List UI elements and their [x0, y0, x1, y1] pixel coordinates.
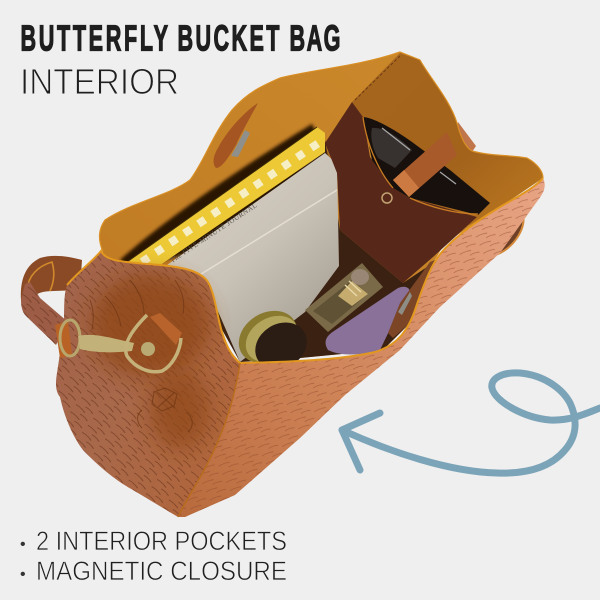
suede rim edge	[99, 52, 543, 252]
title: BAG	[290, 19, 341, 59]
dark slit behind book	[120, 124, 330, 270]
yellow cover	[127, 127, 325, 272]
side seam	[178, 363, 240, 517]
title: BUTTERFLY	[20, 19, 168, 59]
shoulder strap	[21, 256, 82, 345]
seam stitching	[355, 56, 400, 100]
arrow	[342, 373, 600, 473]
book title: The FIVE-MINUTE JOURNAL	[169, 201, 259, 265]
strap keeper	[55, 321, 72, 358]
page block	[160, 153, 339, 362]
brass clasp hardware	[60, 313, 182, 372]
rivet	[141, 342, 155, 356]
bullet: magnetic closure: •	[20, 566, 26, 583]
D ring	[126, 315, 181, 372]
embossed flower	[90, 280, 192, 432]
suede right wall	[352, 53, 543, 225]
back tabs behind the rim	[456, 122, 524, 254]
magnetic flap	[388, 260, 435, 338]
cover pattern	[142, 140, 323, 262]
journal book	[127, 127, 339, 362]
snap hook	[78, 335, 134, 352]
title: BUCKET	[178, 19, 280, 59]
interior dark floor	[200, 140, 433, 362]
left magnet tab	[214, 103, 258, 168]
subtitle: INTERIOR	[20, 61, 179, 102]
feature list	[20, 526, 287, 586]
purple pouch	[326, 287, 410, 354]
feature list: MAGNETIC CLOSURE	[36, 556, 287, 586]
phone in pocket	[363, 117, 490, 215]
right outer panel	[178, 178, 545, 517]
left outer panel	[56, 251, 240, 517]
pocket rim	[363, 117, 478, 214]
pocket wall	[325, 102, 477, 283]
leather tab	[150, 313, 182, 345]
pocket pull tab	[382, 132, 457, 203]
interior suede back wall	[99, 52, 543, 362]
side ring	[60, 320, 80, 356]
title	[20, 19, 340, 59]
bullet: interior pockets: •	[20, 536, 26, 553]
rim edge	[67, 178, 543, 363]
perfume bottle	[305, 263, 383, 332]
bag illustration	[21, 52, 545, 517]
feature list: 2 INTERIOR POCKETS	[36, 526, 287, 556]
gold tin	[229, 300, 316, 379]
saturated centre shading on leather	[90, 273, 210, 450]
